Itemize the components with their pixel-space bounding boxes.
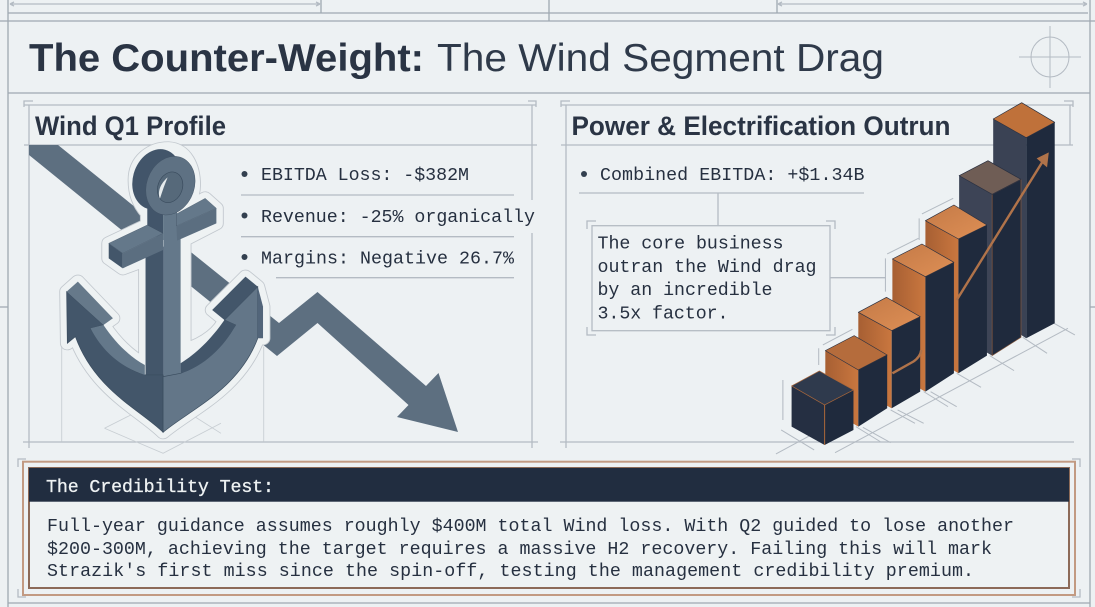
anchor right fluke bbox=[163, 287, 258, 432]
arrow: growth trend bbox=[892, 152, 1049, 373]
bullet list: Margins: Negative 26.7% bbox=[261, 250, 514, 270]
callout: 3.5x factor: outran the Wind drag bbox=[598, 258, 816, 278]
bullet list bbox=[241, 166, 535, 278]
bullet: combined ebitda bbox=[579, 166, 865, 226]
anchor shank bbox=[146, 247, 163, 390]
bar 6 bbox=[959, 161, 1021, 356]
credibility header band: The Credibility Test: bbox=[46, 478, 274, 498]
bullet list: EBITDA Loss: -$382M bbox=[261, 166, 469, 186]
callout: 3.5x factor: by an incredible bbox=[598, 281, 772, 301]
heading: power and electrification outrun: Power & Electrification Outrun bbox=[572, 111, 950, 141]
panel: power and electrification outrun bbox=[560, 101, 1075, 454]
credibility body text bbox=[47, 517, 1014, 582]
anchor left fluke bbox=[67, 292, 163, 432]
icon: anchor bbox=[62, 144, 264, 453]
credibility body text: Full-year guidance assumes roughly $400M total Wind loss. With Q2 guided to lose another bbox=[47, 517, 1014, 537]
icon: crosshair bbox=[1019, 26, 1081, 88]
chart: falling arrow bbox=[29, 145, 458, 432]
bar 1 bbox=[792, 371, 853, 445]
chart: rising isometric bars bbox=[776, 103, 1075, 454]
callout: 3.5x factor: The core business bbox=[598, 234, 784, 254]
bar 7 bbox=[993, 103, 1055, 338]
bullet: combined ebitda: Combined EBITDA: +$1.34B bbox=[600, 166, 865, 186]
anchor stock bbox=[109, 225, 163, 253]
credibility header band bbox=[29, 468, 1069, 502]
callout: 3.5x factor: 3.5x factor. bbox=[598, 304, 728, 324]
title: The Wind Segment Drag bbox=[437, 37, 884, 80]
bar 3 bbox=[858, 297, 920, 408]
bar 5 bbox=[925, 205, 987, 373]
panel: the credibility test bbox=[18, 459, 1080, 597]
callout: 3.5x factor bbox=[587, 221, 886, 335]
title: The Counter-Weight: bbox=[29, 37, 424, 80]
heading: wind q1 profile: Wind Q1 Profile bbox=[35, 111, 226, 141]
anchor ring bbox=[125, 144, 188, 215]
bullet list: Revenue: -25% organically bbox=[261, 208, 535, 228]
bar 4 bbox=[892, 244, 954, 392]
panel: wind q1 profile bbox=[23, 101, 538, 453]
anchor neck bbox=[147, 197, 177, 240]
credibility body text: Strazik's first miss since the spin-off, testing the management credibility premium. bbox=[47, 562, 974, 582]
bar 2 bbox=[825, 336, 887, 427]
credibility body text: $200-300M, achieving the target requires a massive H2 recovery. Failing this will mark bbox=[47, 540, 992, 560]
title bbox=[29, 37, 884, 80]
